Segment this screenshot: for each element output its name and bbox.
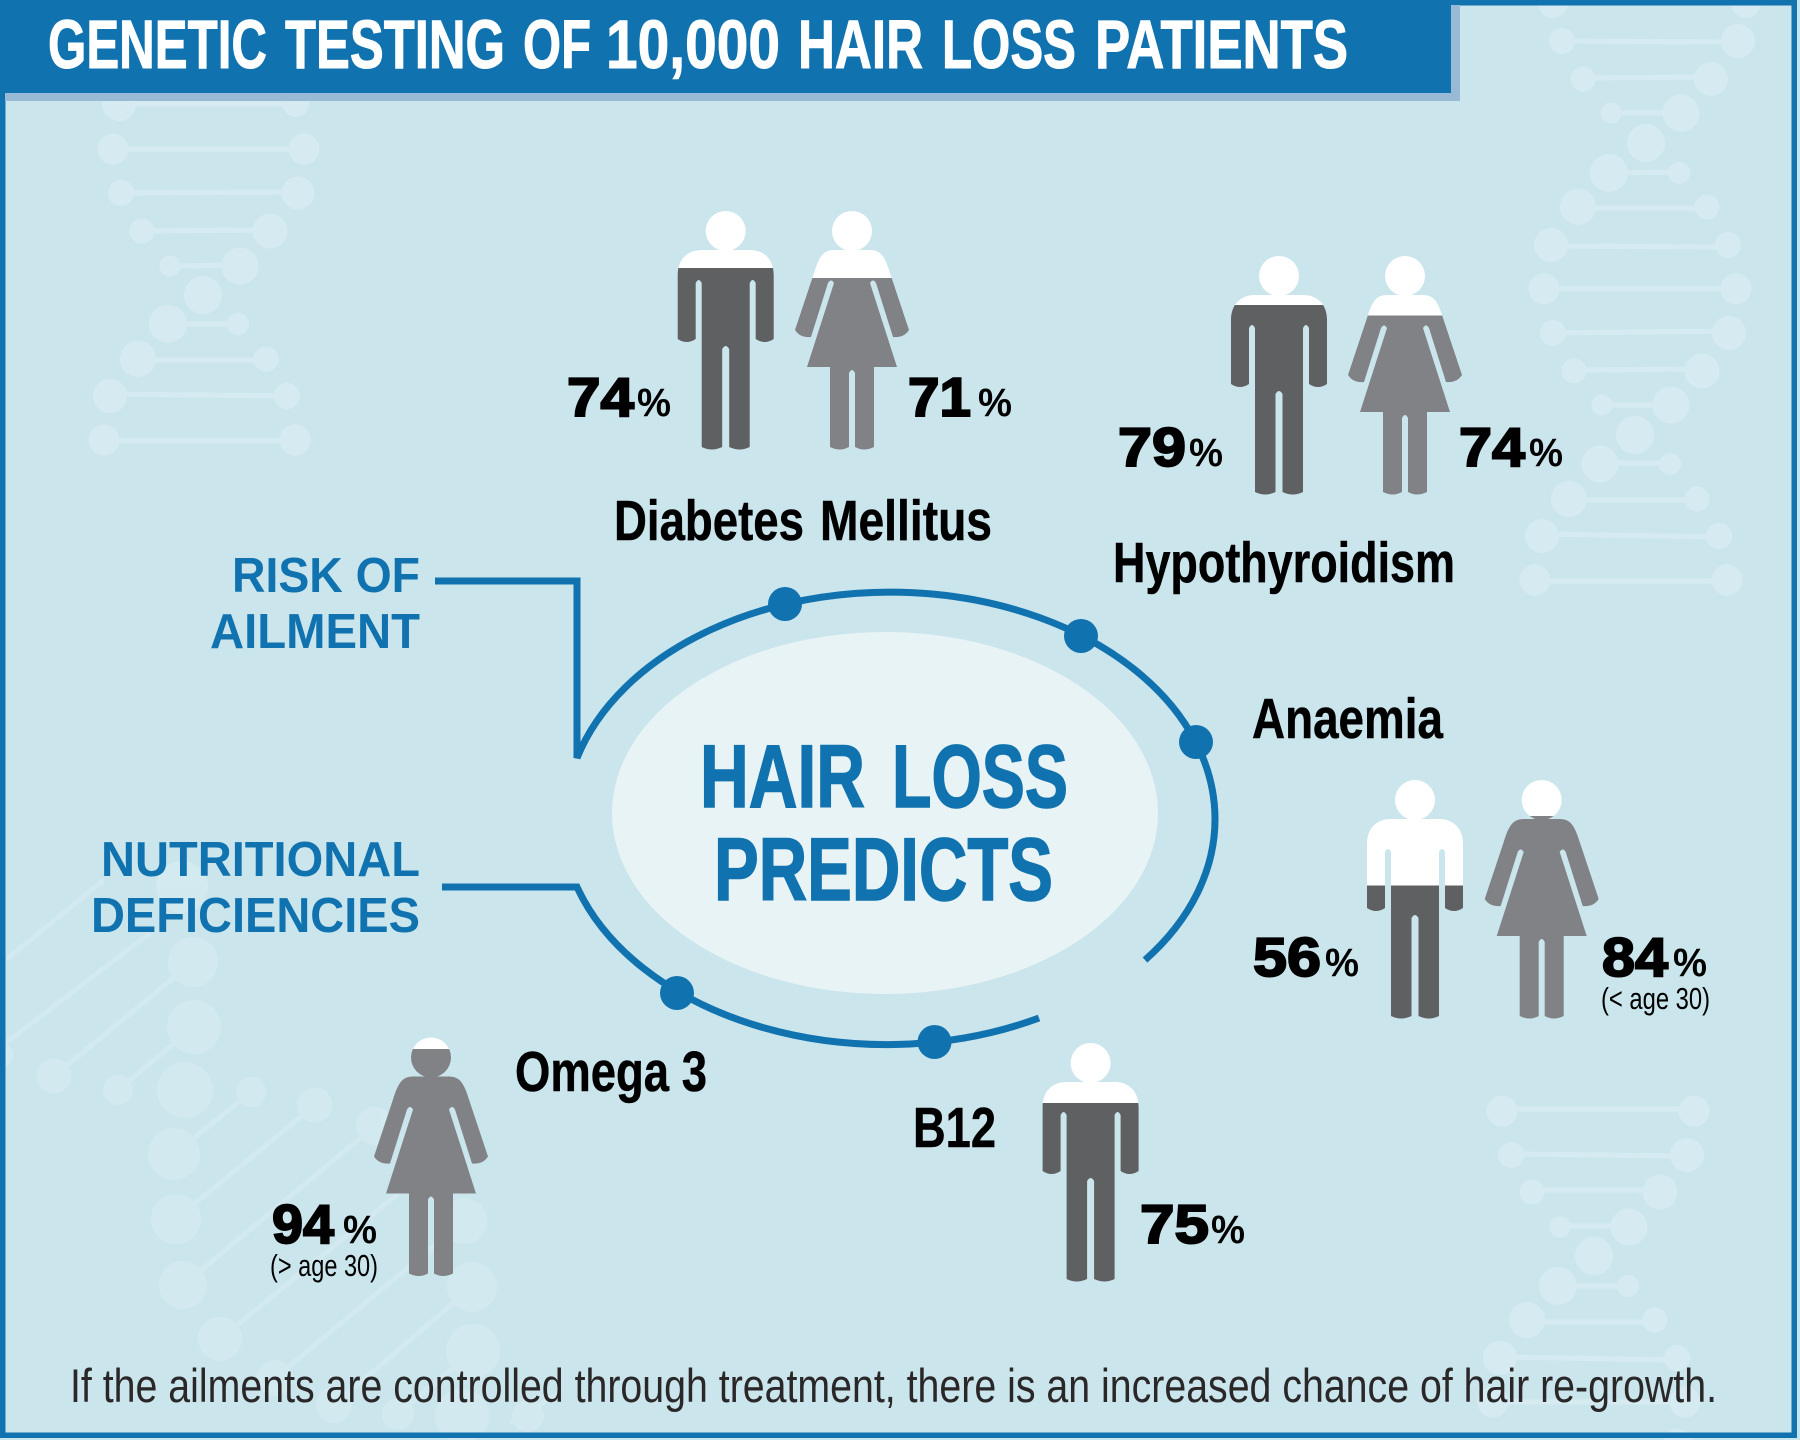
center title: LOSS	[892, 726, 1068, 826]
label: omega 3: Omega 3	[515, 1040, 707, 1104]
icon: woman 71%	[795, 211, 909, 450]
stat: 79%: %	[1189, 431, 1223, 475]
stat: 94% over age 30: (> age 30)	[270, 1248, 378, 1283]
title: OF	[523, 6, 591, 83]
label: hypothyroidism: Hypothyroidism	[1113, 531, 1455, 595]
icon: man 79%	[1231, 256, 1327, 494]
stat: 79%: 79	[1118, 416, 1186, 478]
title: GENETIC	[48, 6, 267, 83]
stat: 74%: 74	[567, 366, 634, 428]
stat: 75%	[1140, 1193, 1245, 1255]
stat: 74%: %	[637, 381, 671, 425]
stat: 74%	[567, 366, 671, 428]
stat: 84% under age 30	[1601, 926, 1710, 1016]
title: 10,000	[606, 6, 780, 83]
stat: 79%	[1118, 416, 1223, 478]
label: diabetes mellitus	[614, 489, 992, 553]
label: nutritional deficiencies: DEFICIENCIES	[91, 889, 420, 943]
label: diabetes mellitus: Diabetes	[614, 489, 804, 553]
icon: man 75%	[1043, 1043, 1139, 1282]
ring dots	[660, 587, 1213, 1059]
center title: PREDICTS	[714, 819, 1053, 919]
label: diabetes mellitus: Mellitus	[820, 489, 992, 553]
label: risk of ailment	[210, 549, 420, 659]
DNA helix: bottom left diagonal	[0, 861, 557, 1440]
center title: HAIR	[700, 726, 865, 826]
title: TESTING	[285, 6, 505, 83]
icon: man 56%	[1367, 780, 1463, 1018]
label: risk of ailment: AILMENT	[210, 605, 420, 659]
DNA helix: top right	[1520, 0, 1761, 596]
center ellipse: hair loss predicts	[612, 632, 1158, 994]
anaemia group	[1252, 687, 1710, 1018]
stat: 84% under age 30: (< age 30)	[1601, 981, 1710, 1016]
label: nutritional deficiencies: NUTRITIONAL	[101, 833, 420, 887]
icon: woman 74%	[1348, 256, 1462, 494]
stat: 71%: 71	[908, 366, 971, 428]
diabetes mellitus group	[567, 211, 1012, 553]
label: b12: B12	[913, 1096, 996, 1160]
title	[48, 6, 1348, 83]
DNA helix: top left	[88, 87, 320, 456]
stat: 74%	[1459, 416, 1563, 478]
icon: woman 94%	[374, 1038, 488, 1276]
stat: 84% under age 30: %	[1673, 941, 1707, 985]
ring arc: risk of ailment	[435, 581, 1215, 960]
stat: 75%: %	[1211, 1208, 1245, 1252]
omega 3 group	[270, 1038, 707, 1283]
icon: man 74%	[678, 211, 774, 450]
stat: 71%: %	[978, 381, 1012, 425]
stat: 56%	[1253, 926, 1359, 988]
label: nutritional deficiencies	[91, 833, 420, 943]
stat: 56%: 56	[1253, 926, 1321, 988]
ring arc: nutritional deficiencies	[442, 887, 1039, 1045]
stat: 71%	[908, 366, 1012, 428]
title: LOSS	[942, 6, 1076, 83]
stat: 94% over age 30	[270, 1193, 378, 1283]
stat: 84% under age 30: 84	[1602, 926, 1668, 988]
stat: 94% over age 30: %	[343, 1208, 377, 1252]
header banner	[0, 0, 1460, 101]
stat: 94% over age 30: 94	[272, 1193, 334, 1255]
title: HAIR	[798, 6, 923, 83]
stat: 74%: %	[1529, 431, 1563, 475]
stat: 75%: 75	[1140, 1193, 1209, 1255]
icon: woman 84%	[1485, 780, 1599, 1018]
stat: 56%: %	[1325, 941, 1359, 985]
label: risk of ailment: RISK OF	[232, 549, 420, 603]
hypothyroidism group	[1113, 256, 1563, 595]
DNA helix: bottom right	[1478, 1096, 1710, 1440]
b12 group	[913, 1043, 1245, 1282]
stat: 74%: 74	[1459, 416, 1525, 478]
center title	[700, 726, 1068, 919]
title: PATIENTS	[1095, 6, 1348, 83]
label: anaemia: Anaemia	[1252, 687, 1444, 751]
